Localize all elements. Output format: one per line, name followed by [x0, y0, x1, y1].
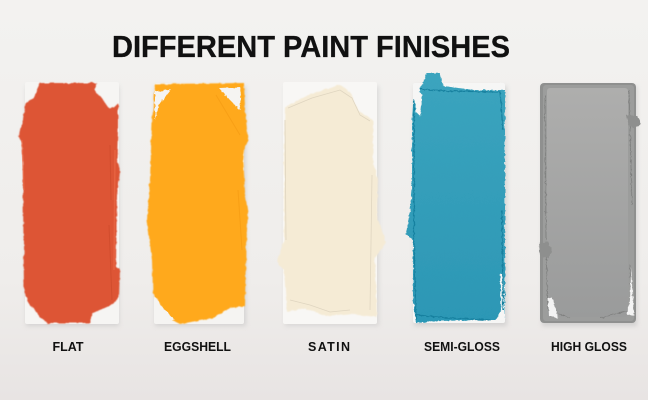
label: high gloss: HIGH GLOSS: [551, 340, 627, 354]
swatch: semi-gloss: [406, 73, 507, 326]
swatch: eggshell: [147, 83, 248, 326]
swatch: high gloss: [539, 83, 641, 326]
label: semi-gloss: SEMI-GLOSS: [424, 340, 500, 354]
label: flat: FLAT: [52, 340, 84, 354]
title: DIFFERENT PAINT FINISHES: [112, 29, 510, 64]
swatch: satin: [277, 82, 386, 326]
label: satin: SATIN: [308, 340, 350, 354]
swatch: flat: [18, 82, 120, 326]
label: eggshell: EGGSHELL: [164, 340, 231, 354]
